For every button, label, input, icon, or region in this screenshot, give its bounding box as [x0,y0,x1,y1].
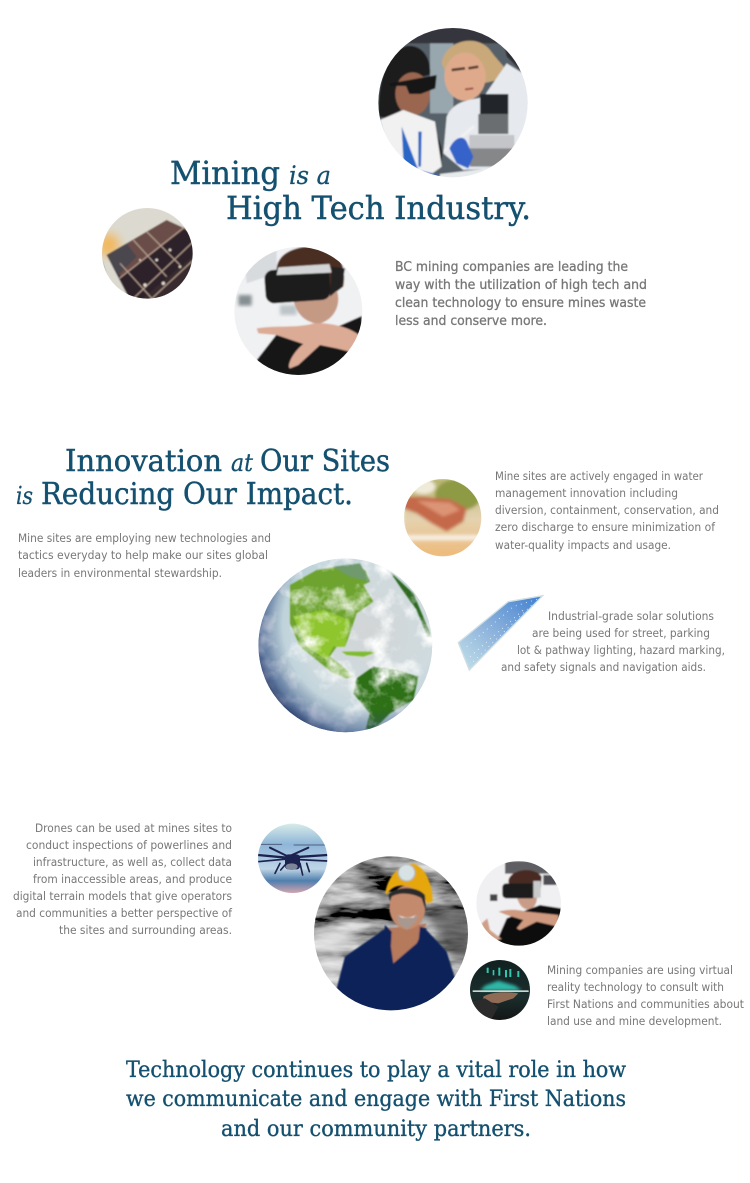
photo: hands catching water [403,478,483,558]
illustration: Earth globe [257,557,433,733]
closing statement: and our community partners. [221,1117,531,1142]
heading: Innovation at Our Sites is Reducing Our Impact: Innovation [65,444,222,479]
title: Mining is a High Tech Industry: Mining [170,154,280,192]
text: water management innovation: Mine sites are actively engaged in water [495,469,703,483]
text: water management innovation: management innovation including [495,486,678,500]
text: drones: digital terrain models that give operators [13,889,232,903]
photo: hand holding tablet with hologram chart [470,960,530,1020]
title: Mining is a High Tech Industry: High Tech Industry. [226,189,531,227]
text: BC mining companies intro: BC mining companies are leading the [395,260,628,275]
text: drones [13,821,233,937]
closing statement [126,1058,626,1142]
text: drones: from inaccessible areas, and produce [33,872,232,886]
heading: Innovation at Our Sites is Reducing Our Impact: is [16,482,33,510]
text: virtual reality consultation: reality technology to consult with [547,980,724,994]
title: Mining is a High Tech Industry [170,154,531,227]
text: water management innovation [495,469,719,552]
heading: Innovation at Our Sites is Reducing Our Impact [16,444,390,512]
text: drones: and communities a better perspective of [16,906,233,920]
heading: Innovation at Our Sites is Reducing Our Impact: Our Sites [260,444,390,479]
text: drones: conduct inspections of powerlines and [26,838,232,852]
text: solar solutions: lot & pathway lighting, hazard marking, [517,643,725,657]
photo: smiling miner with yellow hard hat [313,855,470,1012]
text: solar solutions [501,609,725,674]
photo: man gesturing with VR headset [475,860,562,948]
photo: man wearing VR headset [233,245,367,378]
photo: solar panels at sunset [102,208,193,299]
heading: Innovation at Our Sites is Reducing Our Impact: at [231,449,253,477]
text: water management innovation: zero discharge to ensure minimization of [495,520,716,534]
text: virtual reality consultation: land use and mine development. [547,1014,722,1028]
text: solar solutions: and safety signals and navigation aids. [501,660,706,674]
text: environmental stewardship: tactics everyday to help make our sites global [18,548,268,562]
illustration: solar panel [458,596,543,670]
text: drones: Drones can be used at mines sites to [35,821,232,835]
text: drones: infrastructure, as well as, collect data [33,855,232,869]
text: environmental stewardship [18,531,271,580]
text: BC mining companies intro: less and conserve more. [395,314,547,329]
photo: drone in flight [257,823,330,893]
text: virtual reality consultation [547,963,744,1028]
text: solar solutions: are being used for street, parking [532,626,710,640]
text: environmental stewardship: leaders in environmental stewardship. [18,566,222,580]
title: Mining is a High Tech Industry: is a [289,161,331,190]
closing statement: we communicate and engage with First Nations [126,1087,626,1112]
text: BC mining companies intro [395,260,647,329]
text: solar solutions: Industrial-grade solar solutions [548,609,714,623]
text: water management innovation: water-quality impacts and usage. [495,538,671,552]
text: BC mining companies intro: clean technology to ensure mines waste [395,296,646,311]
heading: Innovation at Our Sites is Reducing Our Impact: Reducing Our Impact. [41,477,353,512]
closing statement: Technology continues to play a vital role in how [126,1058,626,1083]
text: drones: the sites and surrounding areas. [59,923,232,937]
text: BC mining companies intro: way with the utilization of high tech and [395,278,647,293]
photo: two scientists in a lab [377,27,530,180]
text: environmental stewardship: Mine sites are employing new technologies and [18,531,271,545]
text: virtual reality consultation: Mining companies are using virtual [547,963,733,977]
text: water management innovation: diversion, containment, conservation, and [495,503,719,517]
